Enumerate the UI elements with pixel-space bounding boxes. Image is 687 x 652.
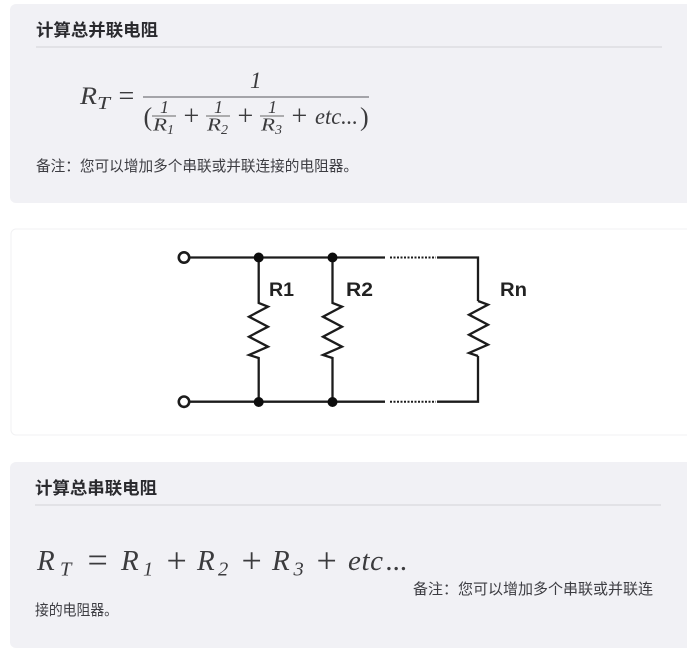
formula: parallel resistance: +	[292, 101, 307, 132]
formula: series resistance	[36, 540, 408, 581]
formula: parallel resistance: )	[360, 102, 369, 132]
formula: series resistance: 3	[292, 559, 304, 581]
formula: series resistance: =	[88, 540, 108, 580]
bottom wire	[190, 356, 478, 402]
formula: series resistance: 2	[218, 559, 228, 581]
formula: series resistance: R	[36, 545, 55, 577]
junction dots	[254, 252, 338, 407]
heading: series: 计算总串联电阻	[35, 478, 157, 498]
formula: parallel resistance: R	[152, 114, 167, 134]
formula: parallel resistance: =	[118, 81, 134, 112]
panel: total series resistance	[10, 462, 687, 648]
formula: series resistance: T	[60, 559, 73, 581]
label R2: R2	[346, 280, 373, 301]
terminal top	[179, 252, 189, 263]
formula: parallel resistance: 1	[250, 68, 262, 93]
formula: parallel resistance: 1	[214, 97, 223, 117]
formula: parallel resistance: R	[260, 114, 275, 134]
formula: parallel resistance: 1	[167, 123, 174, 138]
formula: parallel resistance: 1	[268, 97, 277, 117]
resistor R1	[249, 258, 268, 402]
formula: parallel resistance: +	[184, 101, 199, 132]
note: parallel: 备注：您可以增加多个串联或并联连接的电阻器。	[36, 158, 358, 175]
top wire	[190, 258, 478, 301]
formula: parallel resistance: (	[144, 102, 152, 132]
panel: circuit diagram	[11, 229, 687, 435]
formula: parallel resistance	[79, 68, 369, 138]
note: series: 接的电阻器。	[35, 602, 118, 619]
formula: parallel resistance: etc...	[315, 104, 358, 129]
formula: series resistance: R	[196, 545, 215, 577]
formula: parallel resistance: R	[206, 114, 221, 134]
resistor Rn	[469, 301, 488, 356]
formula: series resistance: R	[120, 545, 139, 577]
label Rn: Rn	[500, 280, 527, 301]
heading: parallel: 计算总并联电阻	[36, 20, 158, 40]
formula: parallel resistance: 3	[274, 123, 282, 138]
circuit: parallel resistors	[179, 252, 488, 407]
resistor R2	[323, 258, 342, 402]
formula: series resistance: +	[166, 540, 187, 580]
formula: parallel resistance: T	[97, 93, 113, 113]
dotted section	[390, 258, 436, 402]
label R1: R1	[269, 280, 294, 301]
formula: parallel resistance: 2	[221, 123, 228, 138]
formula: parallel resistance: 1	[160, 97, 169, 117]
formula: parallel resistance: +	[238, 101, 253, 132]
formula: series resistance: +	[316, 540, 337, 580]
panel: total parallel resistance	[10, 4, 687, 203]
formula: series resistance: etc	[348, 545, 383, 577]
note: series	[35, 581, 653, 619]
formula: series resistance: 1	[143, 559, 153, 581]
formula: series resistance: R	[271, 545, 290, 577]
formula: series resistance: +	[242, 540, 262, 580]
formula: series resistance: ...	[386, 545, 408, 577]
note: series: 备注：您可以增加多个串联或并联连	[413, 581, 653, 598]
formula: parallel resistance: R	[79, 83, 97, 110]
terminal bottom	[179, 396, 189, 407]
